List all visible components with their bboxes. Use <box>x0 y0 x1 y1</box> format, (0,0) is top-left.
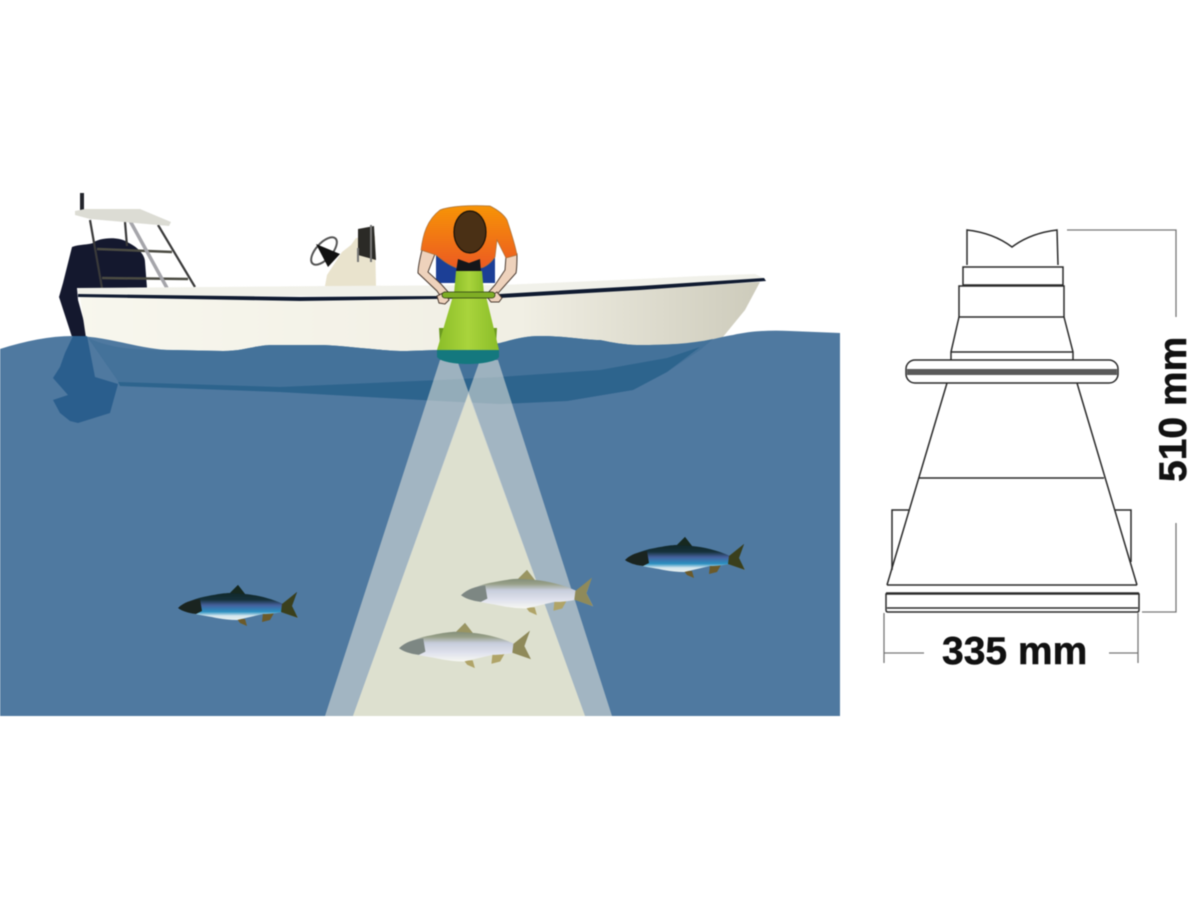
submerged cone base <box>437 350 499 364</box>
height label: 510 mm <box>1152 337 1195 482</box>
sonar beams <box>325 360 612 716</box>
dimension line: width <box>884 613 1138 663</box>
water <box>0 331 840 716</box>
side brackets <box>439 328 497 345</box>
t-top canopy and frame <box>75 193 195 288</box>
arms <box>418 250 517 301</box>
beam overlap <box>353 394 585 716</box>
top cap <box>967 230 1058 265</box>
green sonar device <box>437 259 499 364</box>
upper cone <box>951 317 1073 360</box>
upper rings <box>959 267 1064 317</box>
main cone <box>886 383 1139 593</box>
shirt <box>421 206 517 268</box>
submerged outboard motor <box>53 336 118 423</box>
boat above the waterline <box>59 193 766 365</box>
base <box>886 594 1139 612</box>
outboard motor <box>59 238 147 340</box>
upper body <box>454 271 484 294</box>
fish: left dark salmon <box>178 585 298 626</box>
side brackets <box>892 510 1131 570</box>
submerged hull <box>88 336 713 404</box>
hands <box>437 292 502 304</box>
fish: lower silver salmon in beam <box>399 623 531 668</box>
flange <box>442 292 495 298</box>
flange <box>906 360 1118 383</box>
hull <box>80 282 760 365</box>
fish: upper silver salmon in beam <box>461 570 593 615</box>
head <box>454 211 486 253</box>
console and steering wheel <box>307 225 376 286</box>
blue trousers <box>436 250 495 283</box>
device cap <box>456 259 481 272</box>
device line drawing <box>886 230 1139 612</box>
cone body <box>437 296 499 350</box>
width label: 335 mm <box>942 630 1087 673</box>
fish: right dark salmon <box>625 537 745 578</box>
hull stripe <box>78 278 766 301</box>
deck <box>78 274 766 296</box>
dimension line: height <box>1067 230 1176 612</box>
person leaning over the boat <box>418 206 517 304</box>
